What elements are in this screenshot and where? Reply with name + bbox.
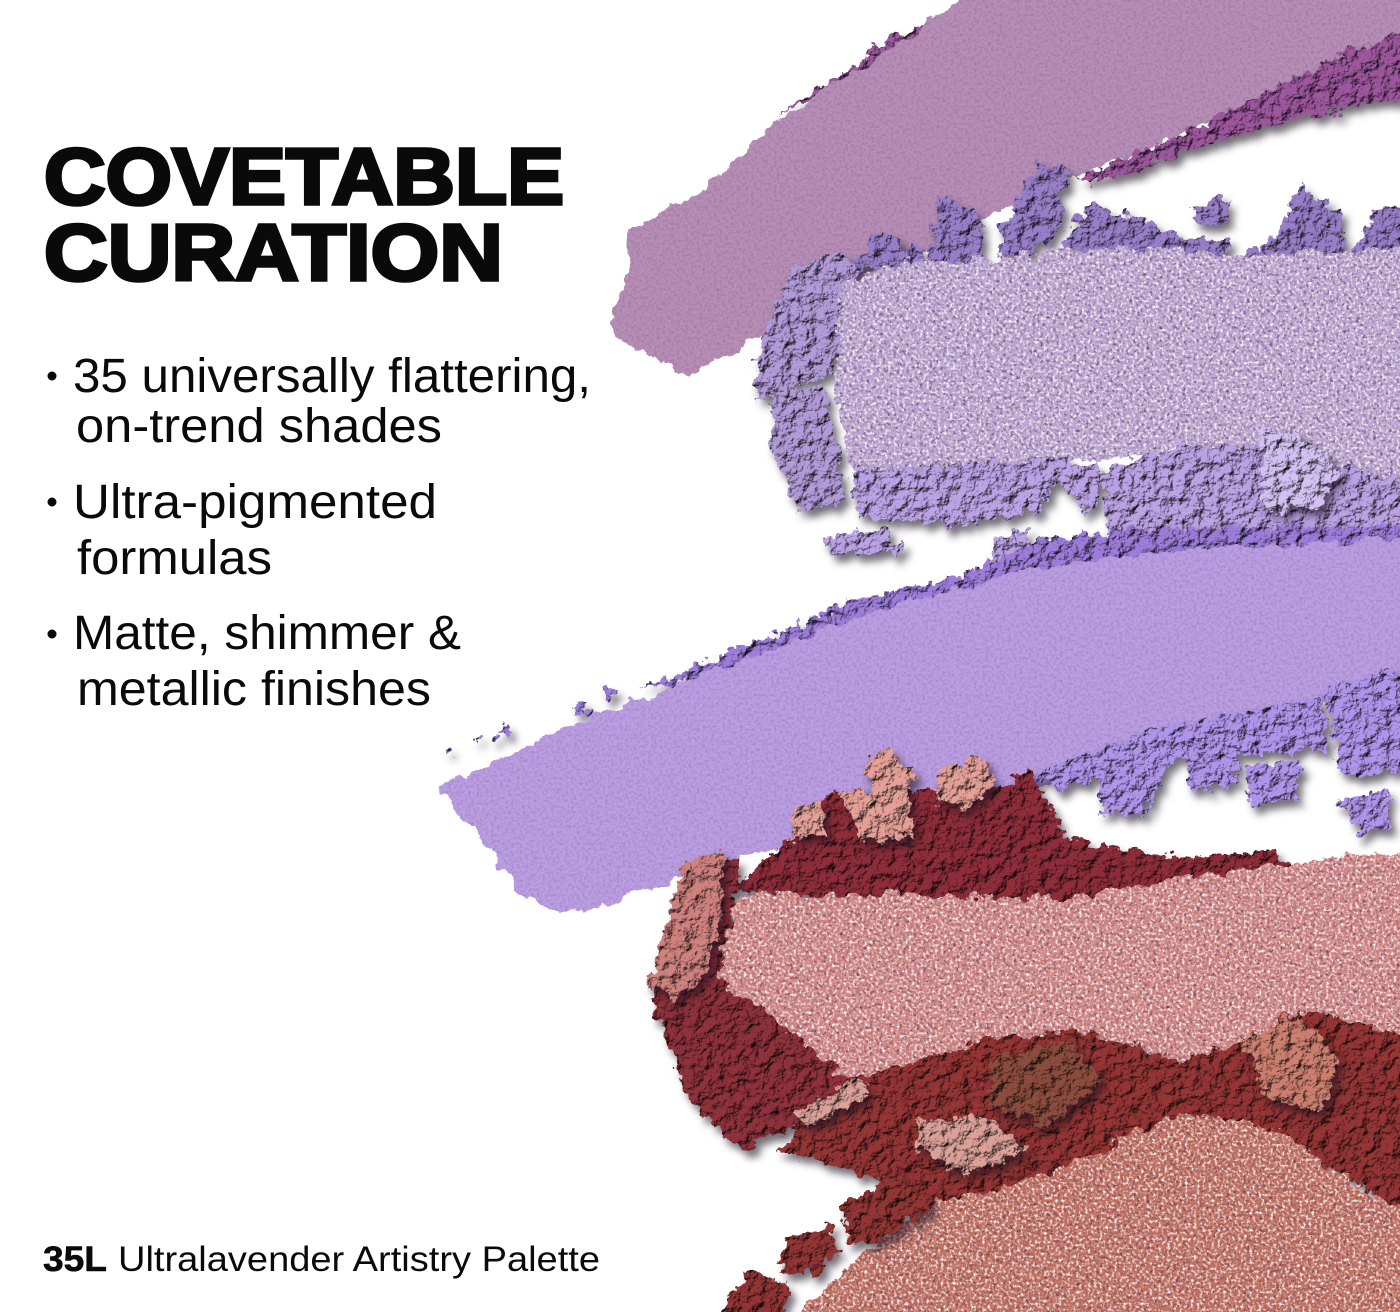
bullet: pigment [48,476,437,585]
dark crumbs lower left [715,1175,935,1312]
flat pan chunk [1262,425,1340,510]
shimmer smear body [835,245,1400,495]
dark brown chunk [990,1040,1105,1125]
mauve upper crumb edge [778,0,1010,114]
dark top crumb band [730,770,1300,905]
loose pan chunks [790,1078,1025,1175]
swatch: mauve matte [606,0,1400,376]
mauve lower crumb edge [1075,20,1400,185]
mauve smear body [606,0,1400,376]
heading: CURATION [44,208,503,297]
bullet: finishes [48,607,461,716]
swatch: light purple matte [438,525,1400,912]
bullet: finishes: Matte, shimmer & [73,607,461,660]
copper chunk right [1240,1015,1340,1110]
bullet: pigment: formulas [77,532,272,585]
dark left crumbs [650,860,900,1150]
matte smear body [438,535,1400,912]
swatch: copper shimmer with crumbs [715,1010,1400,1312]
feature list [48,350,591,716]
product name caption: Ultralavender Artistry Palette [118,1240,600,1279]
shimmer smear body [720,845,1400,1080]
copper smear body [760,1112,1400,1312]
pink top crumbs [792,750,995,842]
upper crumb trail [447,525,1400,759]
lower crumbs [1030,670,1400,835]
upper crumbs [850,162,1400,270]
pan fragment left [650,850,725,1000]
heading: COVETABLE [44,132,564,221]
dark mixed crumb band [780,1010,1400,1230]
bullet: pigment: Ultra-pigmented [73,476,437,529]
swatch: lavender shimmer with crumbs [755,162,1400,570]
bullet: finishes: metallic finishes [77,663,431,716]
bullet: shades [48,350,591,453]
left broken pan pieces [755,250,858,512]
product name caption: 35L [43,1240,107,1279]
swatch: rose shimmer with crumbs [650,750,1400,1150]
lower crumbs [825,445,1400,570]
bullet: shades: on-trend shades [76,400,442,453]
bullet: shades: 35 universally flattering, [73,350,591,403]
heading [44,132,564,297]
